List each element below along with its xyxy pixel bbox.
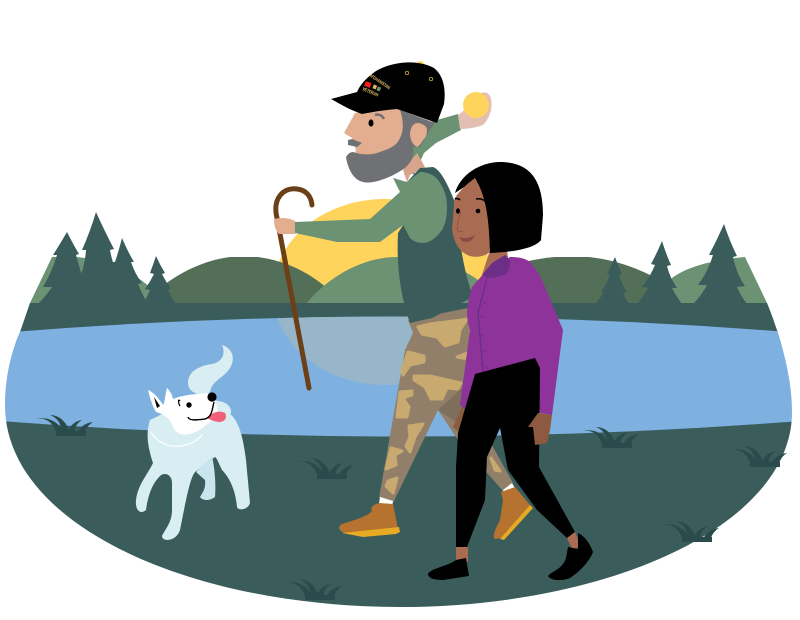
man brow <box>375 115 384 119</box>
man right sole <box>500 505 533 540</box>
woman ankle left <box>456 547 468 562</box>
dog mouth <box>188 402 214 420</box>
woman leggings <box>456 358 575 548</box>
shirt buttons <box>481 287 489 369</box>
hill: right dark <box>528 257 650 303</box>
man back arm <box>400 114 461 175</box>
dog <box>136 345 250 540</box>
cap text: AFGHANISTAN <box>368 73 392 91</box>
man mustache <box>348 139 362 147</box>
man right boot <box>494 487 530 539</box>
man back hand <box>458 92 492 129</box>
landscape <box>5 257 792 607</box>
trees right <box>595 224 747 304</box>
dog eye <box>186 402 192 408</box>
man neck <box>403 153 425 182</box>
man pants <box>379 308 513 503</box>
socks <box>379 483 515 506</box>
shirt collar <box>482 255 510 278</box>
cap <box>331 61 445 123</box>
man sleeve <box>295 172 447 243</box>
woman lips <box>459 235 475 242</box>
camo spots <box>386 319 500 493</box>
hill: centre <box>307 257 478 303</box>
cap ribbons <box>364 81 381 91</box>
woman brows <box>455 199 486 202</box>
woman far hand <box>453 405 465 432</box>
woman nose <box>457 212 463 232</box>
man left sole <box>342 527 400 537</box>
dog body <box>136 400 250 540</box>
man eye <box>368 119 374 127</box>
dog brow <box>178 400 180 406</box>
woman neck <box>482 250 508 275</box>
dog ear marking <box>154 397 160 408</box>
dog tail <box>188 345 233 394</box>
man vest <box>398 167 473 323</box>
ball <box>463 92 489 118</box>
woman eye right <box>476 209 480 213</box>
cap eyelet left <box>405 71 409 75</box>
pants back leg shade <box>438 385 465 425</box>
woman eye left <box>456 208 460 214</box>
woman hair <box>455 162 543 253</box>
shirt placket <box>478 278 487 372</box>
sun reflection <box>278 316 470 385</box>
cap eyelet right <box>429 77 433 81</box>
cap shell <box>331 62 445 123</box>
grass tufts <box>36 415 787 600</box>
dog nose <box>207 392 217 402</box>
hill: left dark <box>167 257 324 303</box>
dog collar <box>151 432 203 446</box>
dog far hind leg <box>196 456 215 500</box>
man <box>274 61 533 540</box>
cane <box>276 189 312 388</box>
woman right shoe <box>548 533 593 580</box>
woman <box>428 162 593 580</box>
yellow button <box>415 61 425 71</box>
man front hand <box>274 218 296 234</box>
cap text lower: VETERAN <box>362 86 380 98</box>
woman left shoe <box>428 558 469 580</box>
dog head <box>148 388 218 435</box>
man face <box>344 108 408 160</box>
sun <box>273 199 497 385</box>
trees left <box>38 212 176 304</box>
woman face <box>452 178 490 257</box>
man beard and hair <box>346 110 435 183</box>
hill: far left <box>28 257 150 310</box>
man ear <box>410 123 427 147</box>
woman hand <box>528 413 552 445</box>
hill: far right <box>672 257 774 320</box>
woman ankle right <box>567 532 581 549</box>
woman shirt <box>460 257 563 415</box>
dog tongue <box>207 412 226 422</box>
ground <box>0 421 800 620</box>
far shore <box>0 303 800 343</box>
lake <box>0 316 800 440</box>
man left boot <box>339 503 398 533</box>
